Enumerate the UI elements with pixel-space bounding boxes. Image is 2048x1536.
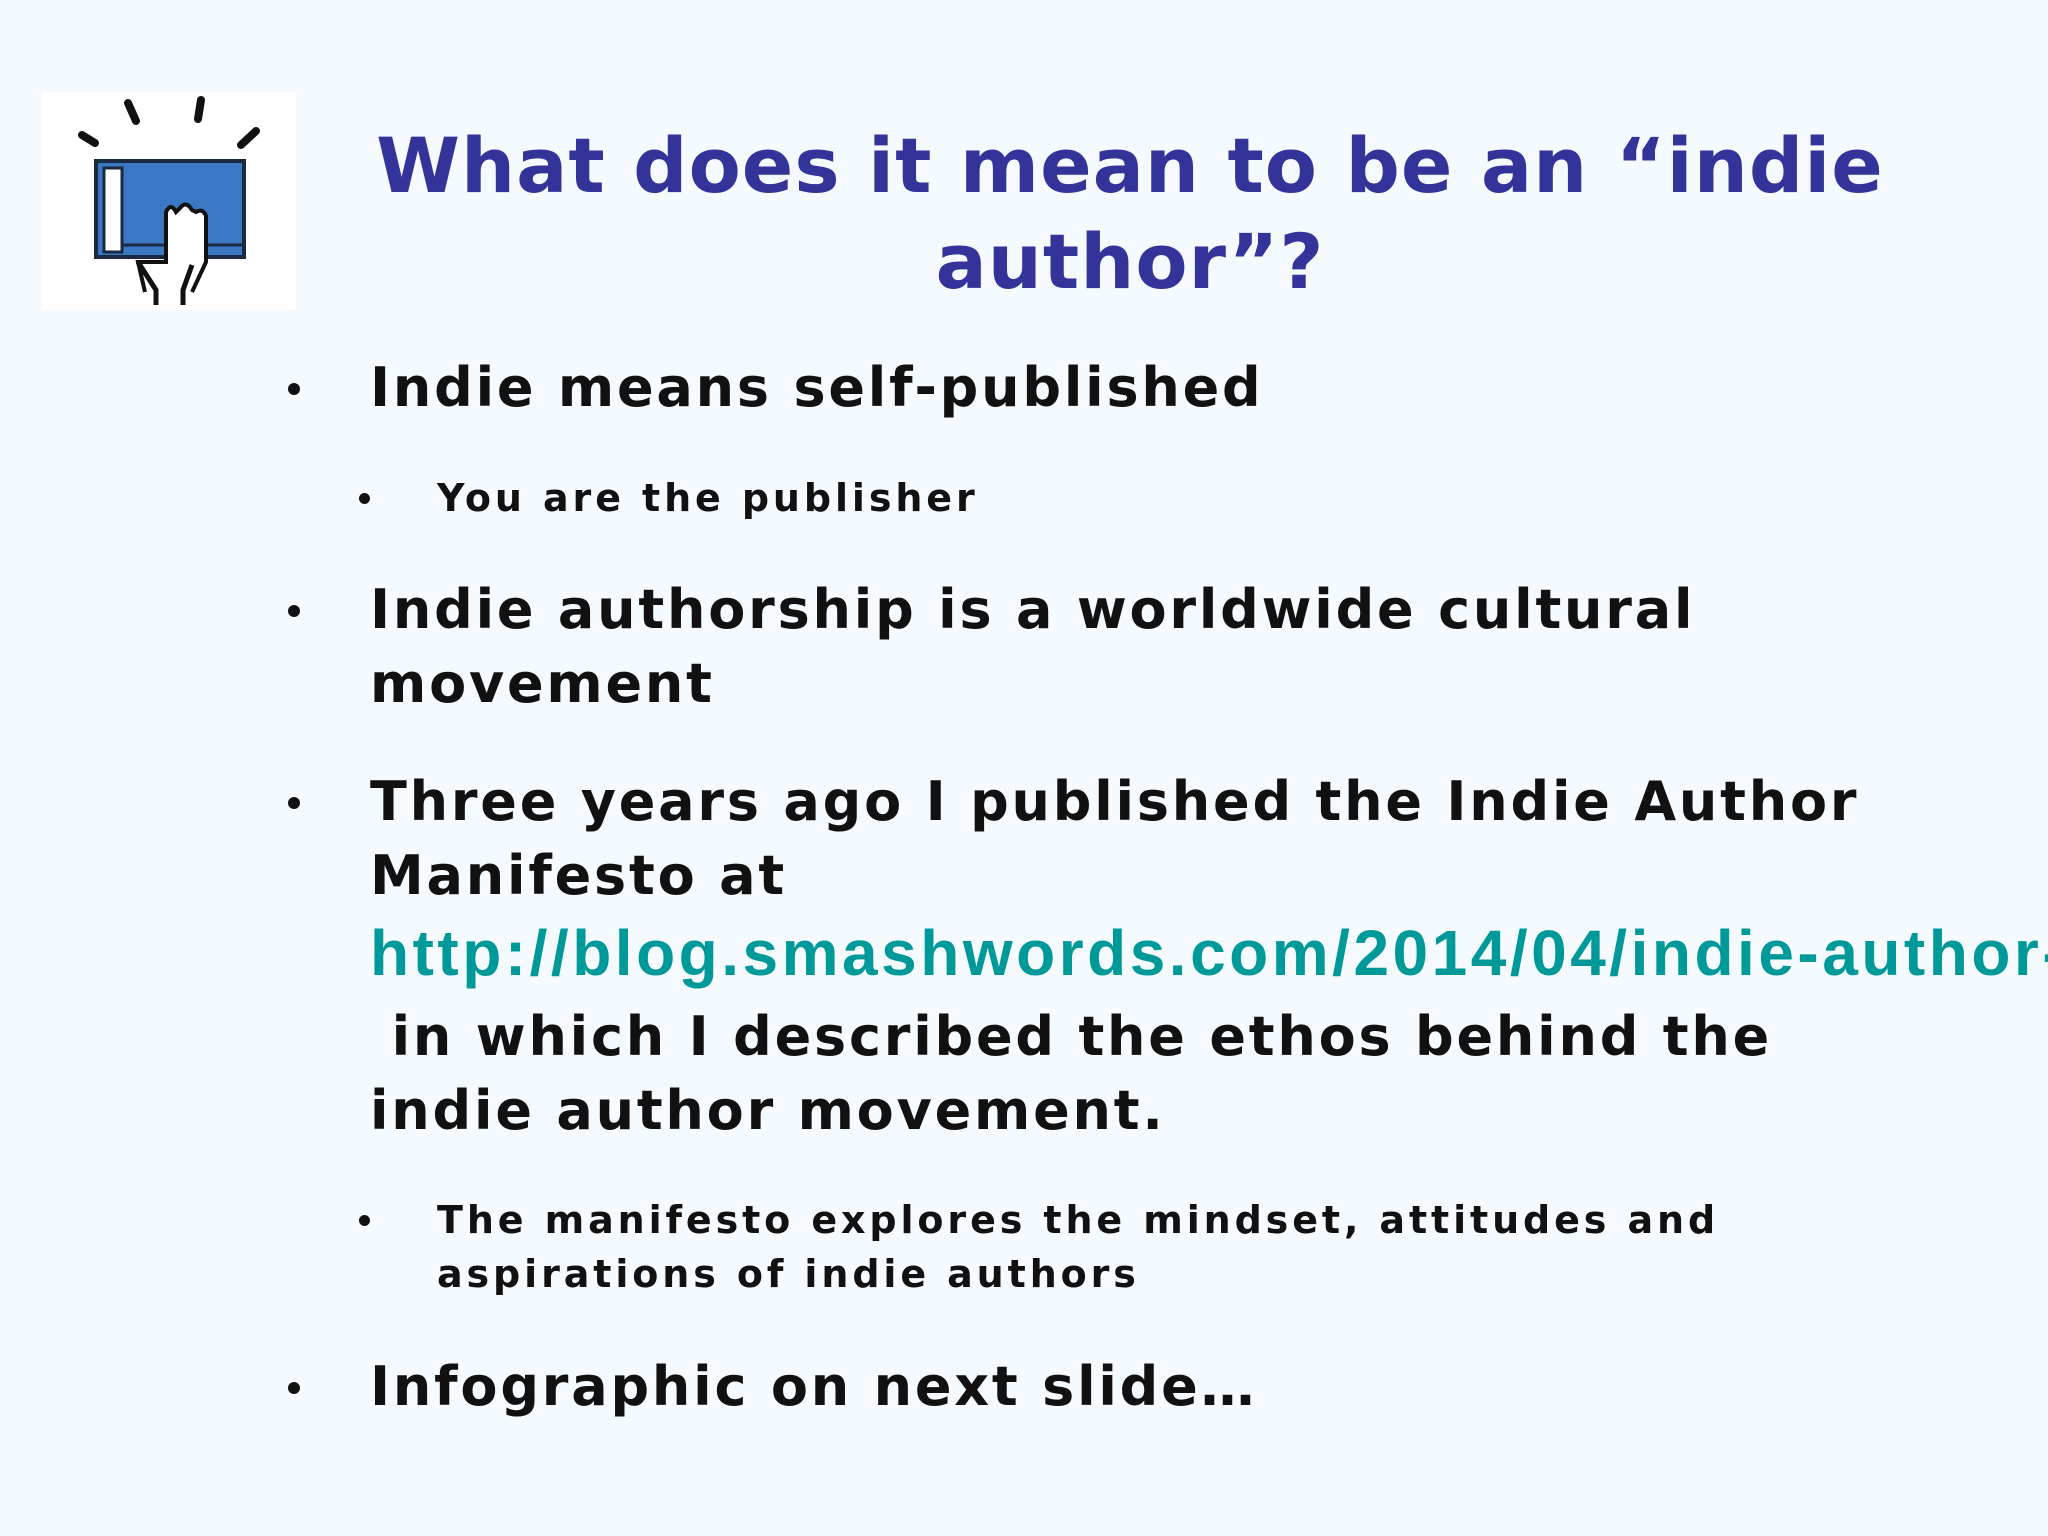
bullet: manifesto: in which I described the ethos behind the bbox=[392, 1005, 1772, 1068]
bullet: manifesto: Manifesto at bbox=[370, 844, 787, 907]
sub bullet: manifesto explores: aspirations of indie authors bbox=[437, 1252, 1140, 1296]
bullet: infographic next: Infographic on next slide… bbox=[370, 1355, 1257, 1418]
title bbox=[376, 121, 1884, 306]
bullet: worldwide movement bbox=[288, 578, 1695, 715]
bullet: indie means self-published: Indie means self-published bbox=[370, 356, 1264, 419]
bullet: manifesto: indie author movement. bbox=[370, 1079, 1166, 1142]
bullet: manifesto bbox=[288, 770, 2048, 1142]
icon: book with hand bbox=[42, 92, 296, 310]
sub bullet: manifesto explores bbox=[359, 1198, 1719, 1296]
sub bullet: manifesto explores: The manifesto explores the mindset, attitudes and bbox=[437, 1198, 1719, 1242]
bullet: worldwide movement: Indie authorship is a worldwide cultural bbox=[370, 578, 1695, 641]
title: What does it mean to be an “indie bbox=[376, 121, 1884, 210]
bullet: worldwide movement: movement bbox=[370, 652, 715, 715]
bullet: manifesto: Three years ago I published the Indie Author bbox=[370, 770, 1859, 833]
title: author”? bbox=[936, 217, 1324, 306]
sub bullet: you are the publisher: You are the publisher bbox=[437, 476, 979, 520]
